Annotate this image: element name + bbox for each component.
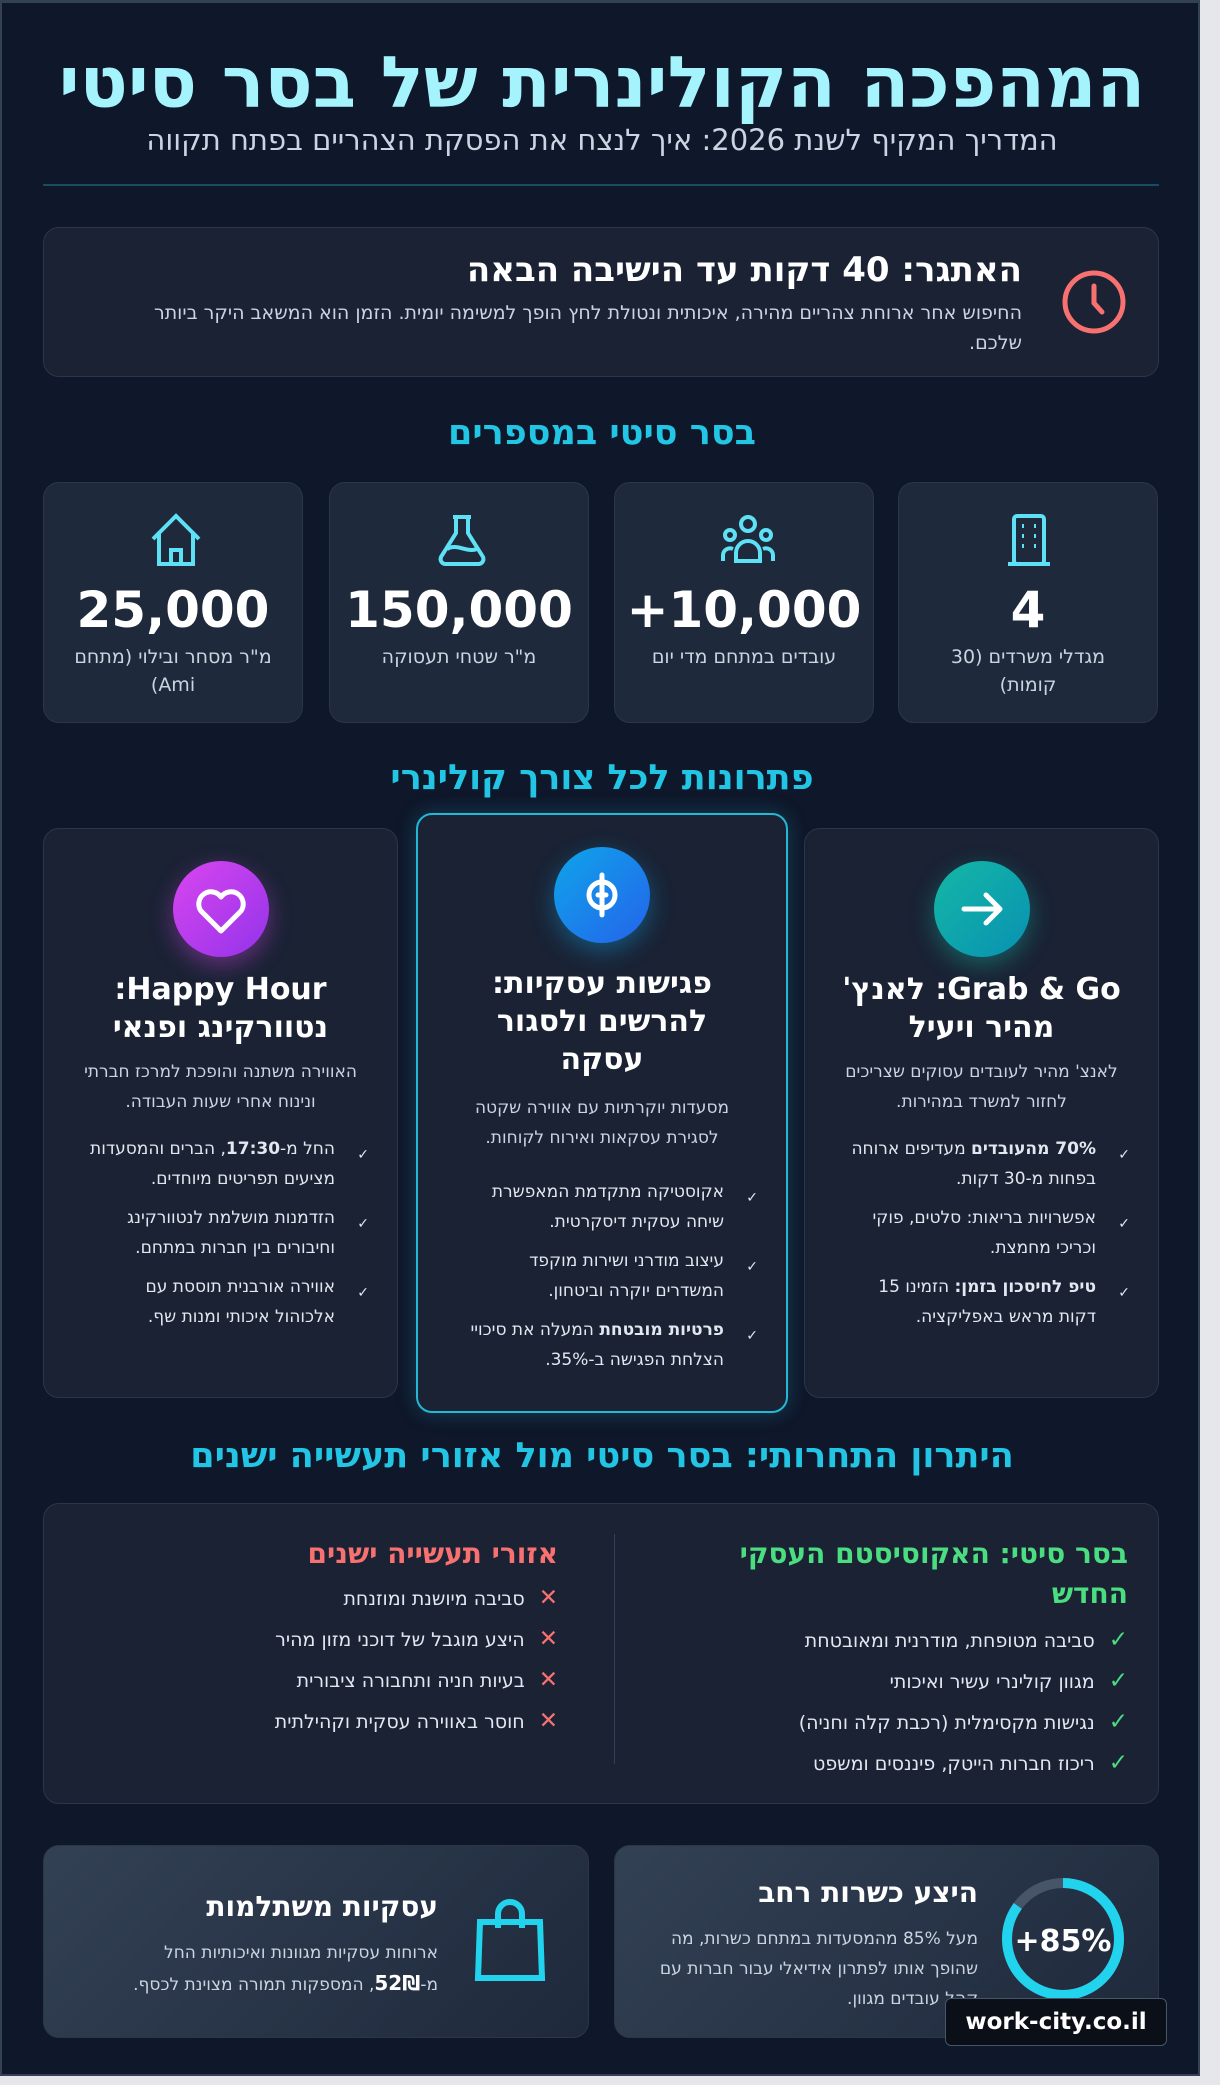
list: פרטיות מובטחת המעלה את סיכויי הצלחת הפגישה ב-35%. — [470, 1320, 724, 1370]
stat: commerce — [43, 482, 303, 723]
panel: business lunches — [43, 1845, 589, 2038]
lunches text: ארוחות עסקיות מגוונות ואיכותיות החל — [164, 1943, 438, 1963]
title: המהפכה הקולינרית של בסר סיטי — [59, 41, 1145, 124]
icon: heart — [172, 861, 268, 957]
column: old industrial zones: ✕סביבה מיושנת ומוזנחת — [343, 1585, 558, 1611]
heading: numbers: בסר סיטי במספרים — [448, 413, 756, 453]
stat: employment area: 150,000 — [345, 581, 573, 639]
column: old industrial zones: אזורי תעשייה ישנים — [308, 1537, 558, 1570]
column: basar city: ✓נגישות מקסימלית (רכבת קלה וחניה) — [799, 1709, 1128, 1735]
list: טיפ לחיסכון בזמן: הזמינו 15 דקות מראש באפליקציה. — [878, 1277, 1096, 1327]
title: Grab & Go: לאנץ' מהיר ויעיל — [842, 972, 1121, 1045]
list — [90, 1139, 367, 1327]
icon: clock — [1062, 270, 1126, 334]
kosher text: מעל 85% מהמסעדות במתחם כשרות, מה שהופך אותו לפתרון אידיאלי עבור חברות עם קהל עובדים מגוון. — [660, 1929, 978, 2009]
panel: grab & go — [804, 828, 1159, 1398]
column: basar city: ✓סביבה מטופחת, מודרנית ומאובטחת — [805, 1627, 1128, 1653]
lunches heading: עסקיות משתלמות — [206, 1890, 438, 1923]
list — [470, 1182, 756, 1370]
list: הזדמנות מושלמת לנטוורקינג וחיבורים בין חברות במתחם. — [127, 1208, 335, 1258]
lunches text — [133, 1943, 438, 1995]
panel: kosher — [614, 1845, 1159, 2038]
panel: challenge — [43, 227, 1159, 377]
donut chart 85%: +85% — [1015, 1924, 1111, 1959]
column: old industrial zones — [274, 1537, 558, 1734]
list: אקוסטיקה מתקדמת המאפשרת שיחה עסקית דיסקרטית. — [492, 1182, 724, 1232]
subtitle: המדריך המקיף לשנת 2026: איך לנצח את הפסקת הצהריים בפתח תקווה — [146, 123, 1058, 157]
panel: business meetings — [416, 813, 788, 1413]
kosher heading: היצע כשרות רחב — [758, 1876, 978, 1909]
column: old industrial zones: ✕היצע מוגבל של דוכני מזון מהיר — [275, 1626, 558, 1652]
list: החל מ-17:30, הברים והמסעדות מציעים תפריטים מיוחדים. — [90, 1139, 335, 1189]
stat: employment area: מ"ר שטחי תעסוקה — [382, 646, 536, 668]
description: מסעדות יוקרתיות עם אווירה שקטה לסגירת עסקאות ואירוח לקוחות. — [475, 1098, 729, 1148]
list — [851, 1139, 1128, 1327]
panel: comparison — [43, 1503, 1159, 1804]
stat: towers: מגדלי משרדים (30 קומות) — [951, 646, 1105, 696]
stat: towers — [898, 482, 1158, 723]
badge: website: work-city.co.il — [965, 2009, 1147, 2035]
column: old industrial zones: ✕חוסר באווירה עסקית וקהילתית — [275, 1708, 558, 1734]
stat: employment area — [329, 482, 589, 723]
icon: arrow — [934, 861, 1030, 957]
column: old industrial zones: ✕בעיות חניה ותחבורה ציבורית — [297, 1667, 558, 1693]
stat: workers: +10,000 — [627, 581, 861, 639]
column: basar city: בסר סיטי: האקוסיסטם העסקי החדש — [740, 1537, 1128, 1610]
icon: target — [554, 847, 650, 943]
stat: commerce: מ"ר מסחר ובילוי (מתחם Ami) — [74, 646, 272, 696]
challenge text: החיפוש אחר ארוחת צהריים מהירה, איכותית ונטולת לחץ הופך למשימה יומית. הזמן הוא המשאב היקר ביותר שלכם. — [154, 302, 1022, 354]
lunches text: מ-52₪, המספקות תמורה מצוינת לכסף. — [133, 1971, 438, 1995]
list: עיצוב מודרני ושירות מוקפד המשדרים יוקרה וביטחון. — [529, 1251, 724, 1301]
challenge heading: האתגר: 40 דקות עד הישיבה הבאה — [467, 250, 1022, 290]
stat: workers: עובדים במתחם מדי יום — [652, 646, 836, 668]
stat: commerce: 25,000 — [77, 581, 269, 639]
description: לאנצ' מהיר לעובדים עסוקים שצריכים לחזור למשרד במהירות. — [845, 1062, 1118, 1112]
column: basar city: ✓ריכוז חברות הייטק, פיננסים ומשפט — [813, 1750, 1128, 1776]
badge: website — [945, 1998, 1167, 2046]
panel: happy hour — [43, 828, 398, 1398]
list: 70% מהעובדים מעדיפים ארוחה בפחות מ-30 דקות. — [851, 1139, 1096, 1189]
description: האווירה משתנה והופכת למרכז חברתי ונינוח אחרי שעות העבודה. — [84, 1062, 357, 1112]
title: Happy Hour: נטוורקינג ופנאי — [113, 972, 328, 1045]
column: basar city — [740, 1537, 1128, 1776]
title: פגישות עסקיות: להרשים ולסגור עסקה — [492, 966, 712, 1077]
stat: workers — [614, 482, 874, 723]
list: אפשרויות בריאות: סלטים, פוקי וכריכי מחמצת. — [872, 1208, 1096, 1258]
donut chart 85% — [1002, 1878, 1124, 1998]
list: אווירה אורבנית תוססת עם אלכוהול איכותי ומנות שף. — [145, 1277, 335, 1327]
heading: competitive advantage: היתרון התחרותי: בסר סיטי מול אזורי תעשייה ישנים — [190, 1436, 1014, 1476]
stat: towers: 4 — [1011, 581, 1045, 639]
heading: solutions: פתרונות לכל צורך קולינרי — [390, 758, 814, 798]
icon: shopping bag — [474, 1899, 546, 1981]
column: basar city: ✓מגוון קולינרי עשיר ואיכותי — [890, 1668, 1128, 1694]
